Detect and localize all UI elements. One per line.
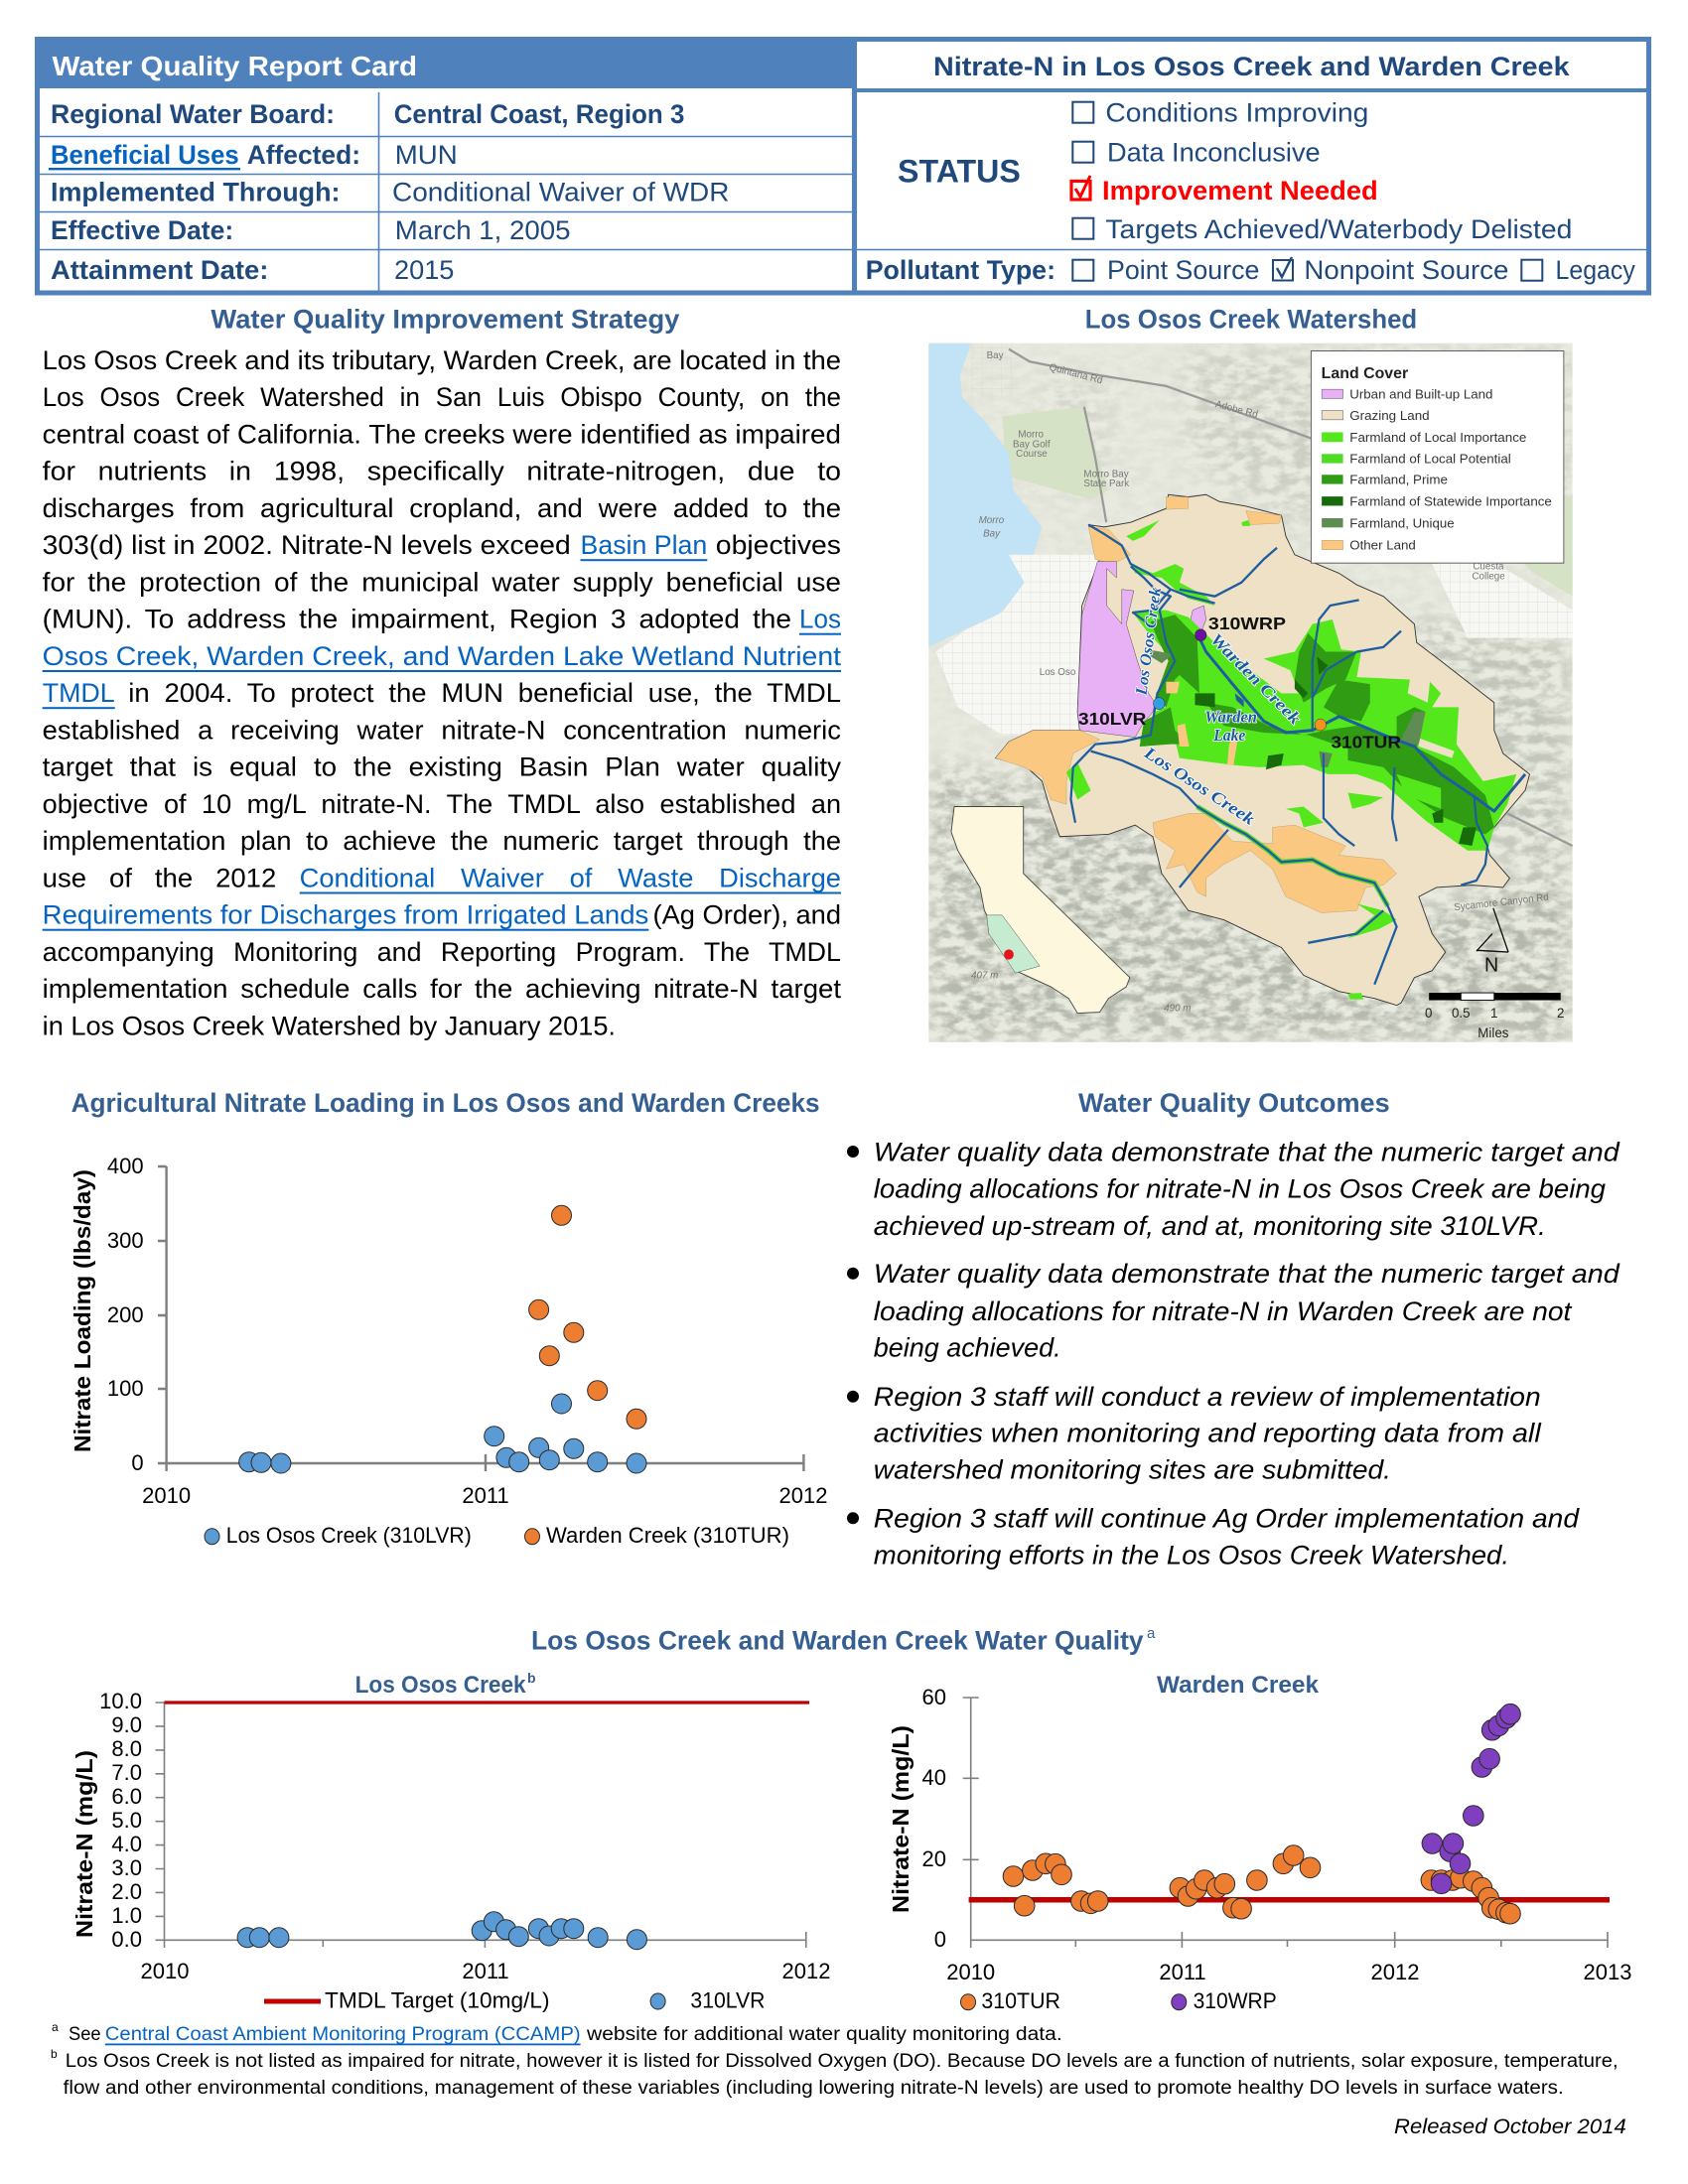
y axis title: Nitrate-N (mg/L) [71, 1750, 97, 1938]
text block: strategy paragraph: established a receiving water nitrate-N concentration numeric [43, 715, 841, 745]
series: Los Osos Creek 310LVR [239, 1394, 646, 1473]
x axis labels: 2011 [1159, 1960, 1206, 1984]
panel: status [854, 40, 1648, 293]
footnote b: flow and other environmental conditions, management of these variables (including lowering nitrate-N levels) are used to promote healthy DO levels in surface waters. [64, 2078, 1564, 2099]
map legend: land cover: Farmland of Statewide Importance [1349, 493, 1552, 509]
outcome 2: loading allocations for nitrate-N in Warden Creek are not [874, 1297, 1573, 1326]
y axis labels: 8.0 [111, 1736, 142, 1761]
map legend: land cover: Farmland of Local Importance [1349, 430, 1526, 445]
footnote b: Los Osos Creek is not listed as impaired for nitrate, however it is listed for Dissolved Oxygen (DO). Because DO levels are a function of nutrients, solar exposure, temperature, [66, 2051, 1618, 2072]
text block: strategy paragraph: implementation schedule calls for the achieving nitrate-N target [43, 974, 842, 1004]
map: place names: Los Oso [1040, 667, 1076, 678]
y axis labels: 0.0 [111, 1927, 142, 1952]
outcome 1: Water quality data demonstrate that the numeric target and [874, 1137, 1620, 1166]
y axis title: Nitrate Loading (lbs/day) [70, 1169, 95, 1452]
series: 310WRP [1422, 1704, 1520, 1894]
text block: strategy paragraph: Requirements for Discharges from Irrigated Lands [43, 900, 648, 930]
map: farmland [1066, 520, 1516, 1000]
text block: strategy paragraph: Los Osos Creek Watershed in San Luis Obispo County, on the [43, 382, 841, 412]
map: north arrow: N [1484, 954, 1498, 977]
map: place names: 407 m [971, 970, 998, 982]
y axis labels: 300 [107, 1228, 144, 1253]
map legend: land cover: Farmland of Local Potential [1349, 451, 1511, 467]
map: scale bar [1425, 993, 1564, 1040]
row: implemented through [51, 178, 729, 207]
target line [969, 1897, 1610, 1902]
row: regional water board: Regional Water Board: [51, 99, 335, 129]
text block: outcomes list [847, 1137, 1620, 1570]
scatter chart: Los Osos Creek [71, 1670, 830, 2013]
outcome 1: loading allocations for nitrate-N in Los Osos Creek are being [874, 1174, 1606, 1204]
row: regional water board: Central Coast, Region 3 [394, 99, 684, 129]
text block: strategy paragraph: central coast of California. The creeks were identified as impaired [43, 419, 841, 449]
map legend: land cover: Farmland, Prime [1349, 472, 1448, 487]
map legend: land cover: Grazing Land [1349, 408, 1430, 423]
text block: strategy paragraph: accompanying Monitoring and Reporting Program. The TMDL [43, 937, 841, 967]
x axis labels: 2012 [782, 1959, 830, 1983]
map: place names: 490 m [1164, 1004, 1191, 1015]
y axis labels: 6.0 [111, 1784, 142, 1809]
outcome 2: Water quality data demonstrate that the numeric target and [874, 1259, 1620, 1289]
x axis labels: 2012 [779, 1483, 827, 1508]
outcome 3: Region 3 staff will conduct a review of implementation [874, 1382, 1541, 1412]
text block: strategy paragraph: Osos Creek, Warden Creek, and Warden Lake Wetland Nutrient [43, 641, 842, 671]
chart title: Los Osos Creek [355, 1672, 526, 1699]
text block: strategy paragraph: objectives [716, 530, 841, 560]
map: scale bar: 2 [1557, 1006, 1564, 1021]
y axis labels: 400 [107, 1154, 144, 1178]
row: attainment date [51, 255, 454, 285]
pollutant type row: Point Source [1107, 255, 1259, 285]
text block: strategy paragraph: target that is equal to the existing Basin Plan water quality [43, 752, 842, 782]
map: Los Osos Creek watershed [928, 343, 1573, 1042]
y axis labels: 60 [922, 1685, 946, 1709]
text block: strategy paragraph: TMDL [43, 678, 115, 708]
y axis labels [922, 1685, 946, 1952]
row: regional water board [51, 99, 684, 129]
y axis labels: 10.0 [99, 1689, 142, 1713]
text block: strategy paragraph: in Los Osos Creek Watershed by January 2015. [43, 1011, 616, 1040]
chart legend: 310LVR [690, 1988, 765, 2013]
outcome 4: Region 3 staff will continue Ag Order implementation and [874, 1504, 1580, 1534]
map: monitoring sites: 310TUR [1332, 733, 1401, 751]
map: place names: State Park [1083, 478, 1130, 489]
map: scale bar: 0 [1425, 1006, 1433, 1021]
text block: strategy paragraph: (MUN). To address the impairment, Region 3 adopted the [43, 605, 791, 634]
outcome 3 [847, 1382, 1542, 1484]
y axis labels [99, 1689, 142, 1952]
map legend: land cover: Other Land [1349, 537, 1416, 553]
outcome 1: achieved up-stream of, and at, monitoring site 310LVR. [874, 1211, 1546, 1241]
y axis labels: 0 [131, 1450, 144, 1475]
chart legend [205, 1523, 789, 1548]
row: beneficial uses: Affected: [247, 140, 360, 170]
heading: water quality charts: a [1147, 1625, 1156, 1642]
heading: report card: Water Quality Report Card [52, 51, 417, 81]
y axis title: Nitrate-N (mg/L) [888, 1725, 914, 1913]
y axis labels: 200 [107, 1302, 144, 1327]
text block: strategy paragraph: (Ag Order), and [653, 900, 841, 930]
map: creek names: Warden [1204, 707, 1257, 726]
row: implemented through: Implemented Through: [51, 178, 340, 207]
map: place names: Bay Golf [1013, 439, 1051, 450]
series: 310TUR [1003, 1845, 1520, 1924]
x axis labels: 2010 [946, 1960, 995, 1984]
map: place names: Adobe Rd [1214, 399, 1259, 421]
x axis labels: 2010 [142, 1483, 191, 1508]
x axis labels: 2011 [462, 1483, 509, 1508]
map legend: land cover: Land Cover [1322, 365, 1408, 382]
y axis labels: 0 [934, 1927, 946, 1952]
text block: strategy paragraph [43, 345, 842, 1040]
heading: water quality outcomes: Water Quality Outcomes [1078, 1088, 1390, 1118]
outcome 4: monitoring efforts in the Los Osos Creek Watershed. [874, 1540, 1509, 1570]
scatter chart: Warden Creek [888, 1672, 1631, 2013]
chart title: b [527, 1670, 536, 1686]
footnote a: a [52, 2020, 59, 2034]
outcome 3: activities when monitoring and reporting data from all [874, 1419, 1542, 1448]
series: 310LVR [237, 1912, 646, 1950]
chart legend: 310WRP [1194, 1988, 1277, 2013]
map: north arrow [1477, 908, 1508, 977]
x axis labels: 2010 [141, 1959, 189, 1983]
outcome 3: watershed monitoring sites are submitted. [874, 1454, 1391, 1484]
status option: targets achieved: Targets Achieved/Waterbody Delisted [1105, 214, 1572, 244]
map: place names: Sycamore Canyon Rd [1454, 892, 1549, 913]
map: other land [996, 497, 1397, 913]
row: beneficial uses: MUN [395, 140, 458, 170]
y axis labels: 4.0 [111, 1832, 142, 1856]
x axis labels: 2011 [462, 1959, 509, 1983]
map: place names: Bay [983, 528, 1001, 540]
map: creek names [1132, 586, 1305, 829]
outcome 2: being achieved. [874, 1333, 1061, 1363]
map: creek names: Los Osos Creek [1132, 586, 1165, 697]
release date: Released October 2014 [1394, 2116, 1626, 2138]
y axis labels: 20 [922, 1846, 946, 1871]
heading: water quality charts: Los Osos Creek and Warden Creek Water Quality [531, 1626, 1144, 1656]
heading: nitrate-N: Nitrate-N in Los Osos Creek and Warden Creek [933, 52, 1571, 81]
map legend: land cover [1311, 350, 1564, 563]
map: creek names: Los Osos Creek [1140, 743, 1258, 829]
chart legend: TMDL Target (10mg/L) [325, 1988, 550, 2013]
text block: strategy paragraph: Conditional Waiver of Waste Discharge [300, 864, 841, 893]
panel: report card [35, 37, 856, 293]
row: effective date: Effective Date: [51, 215, 233, 245]
map: urban land [1077, 562, 1210, 738]
map: monitoring sites: 310WRP [1208, 614, 1286, 633]
chart legend: Warden Creek (310TUR) [546, 1523, 789, 1548]
map: monitoring sites [1078, 614, 1401, 751]
status option: improvement needed: Improvement Needed [1102, 176, 1378, 205]
map: place names [971, 350, 1549, 1015]
y axis labels: 100 [107, 1376, 144, 1401]
map: place names: Quintana Rd [1048, 362, 1103, 386]
y axis labels: 2.0 [111, 1879, 142, 1904]
pollutant type row [866, 255, 1635, 285]
map legend: land cover: Farmland, Unique [1349, 515, 1455, 530]
footnote a: See [69, 2024, 101, 2045]
x axis labels: 2013 [1584, 1960, 1631, 1984]
chart legend: Los Osos Creek (310LVR) [226, 1523, 472, 1548]
outcome 1 [847, 1137, 1620, 1241]
row: beneficial uses: Beneficial Uses [51, 140, 239, 170]
y axis labels: 3.0 [111, 1855, 142, 1880]
map: creek names: Warden Creek [1206, 629, 1305, 729]
row: beneficial uses [49, 140, 458, 170]
footnote a: Central Coast Ambient Monitoring Program (CCAMP) [105, 2024, 581, 2045]
pollutant type row: Legacy [1555, 255, 1635, 285]
row: effective date [51, 215, 570, 245]
text block: strategy paragraph: implementation plan to achieve the numeric target through the [43, 826, 841, 856]
row: effective date: March 1, 2005 [395, 215, 570, 245]
heading: agricultural nitrate loading: Agricultural Nitrate Loading in Los Osos and Warden Creeks [71, 1088, 820, 1118]
row: implemented through: Conditional Waiver of WDR [392, 178, 729, 207]
status option: data inconclusive: Data Inconclusive [1107, 138, 1321, 168]
x axis labels [141, 1959, 830, 1983]
chart legend: 310TUR [981, 1988, 1060, 2013]
map: scale bar: Miles [1477, 1025, 1509, 1040]
text block: strategy paragraph: for the protection of the municipal water supply beneficial use [43, 568, 841, 598]
chart legend [264, 1988, 765, 2013]
map: scale bar: 1 [1490, 1006, 1498, 1021]
map: place names: Bay [987, 350, 1004, 361]
y axis labels: 40 [922, 1765, 946, 1790]
status option: conditions improving: Conditions Improving [1105, 98, 1368, 128]
map: place names: College [1472, 571, 1505, 583]
heading: improvement strategy: Water Quality Improvement Strategy [211, 305, 679, 335]
map: scale bar: 0.5 [1452, 1006, 1471, 1021]
map: monitoring sites: 310LVR [1078, 710, 1146, 729]
footnote b: b [51, 2047, 58, 2061]
scatter chart: nitrate loading [70, 1154, 827, 1548]
y axis labels: 1.0 [111, 1903, 142, 1928]
text block: strategy paragraph: 303(d) list in 2002. Nitrate-N levels exceed [43, 530, 571, 560]
chart legend [961, 1988, 1277, 2013]
text block: strategy paragraph: use of the 2012 [43, 864, 276, 893]
pollutant type row: Pollutant Type: [866, 255, 1055, 285]
outcome 4 [847, 1504, 1580, 1570]
text block: strategy paragraph: Los Osos Creek and its tributary, Warden Creek, are located in the [43, 345, 841, 375]
footnote b [51, 2047, 1618, 2099]
map: watershed grazing land [996, 494, 1529, 1006]
map: creeks [1070, 525, 1525, 985]
map: place names: Cuesta [1473, 562, 1504, 573]
text block: strategy paragraph: in 2004. To protect the MUN beneficial use, the TMDL [128, 678, 841, 708]
map: place names: Morro [979, 515, 1005, 526]
text block: strategy paragraph: for nutrients in 1998, specifically nitrate-nitrogen, due to [43, 457, 841, 486]
y axis labels: 9.0 [111, 1712, 142, 1737]
row: attainment date: 2015 [394, 255, 454, 285]
y axis labels: 7.0 [111, 1760, 142, 1785]
text block: strategy paragraph: discharges from agricultural cropland, and were added to the [43, 493, 841, 523]
map legend: land cover: Urban and Built-up Land [1349, 386, 1492, 402]
x axis labels: 2012 [1371, 1960, 1419, 1984]
x axis labels [946, 1960, 1631, 1984]
map: creek names: Lake [1212, 726, 1246, 745]
x axis labels [142, 1483, 827, 1508]
map: California inset [951, 806, 1130, 1014]
map: place names: Course [1016, 449, 1048, 460]
row: attainment date: Attainment Date: [51, 255, 268, 285]
series: Warden Creek 310TUR [529, 1205, 646, 1429]
map: place names: Morro [1018, 429, 1044, 441]
pollutant type row: Nonpoint Source [1304, 255, 1508, 285]
text block: strategy paragraph: Los [799, 605, 841, 634]
footnote a [52, 2020, 1062, 2045]
text block: strategy paragraph: Basin Plan [580, 530, 707, 560]
y axis labels [107, 1154, 144, 1475]
outcome 2 [847, 1259, 1620, 1363]
footnote a: website for additional water quality monitoring data. [586, 2024, 1062, 2045]
text block: strategy paragraph: objective of 10 mg/L nitrate-N. The TMDL also established an [43, 789, 841, 819]
label: status: STATUS [898, 153, 1021, 189]
heading: watershed: Los Osos Creek Watershed [1085, 305, 1417, 335]
map: place names: Morro Bay [1083, 469, 1129, 480]
chart title: Warden Creek [1157, 1672, 1320, 1699]
target line [165, 1701, 809, 1705]
y axis labels: 5.0 [111, 1808, 142, 1833]
